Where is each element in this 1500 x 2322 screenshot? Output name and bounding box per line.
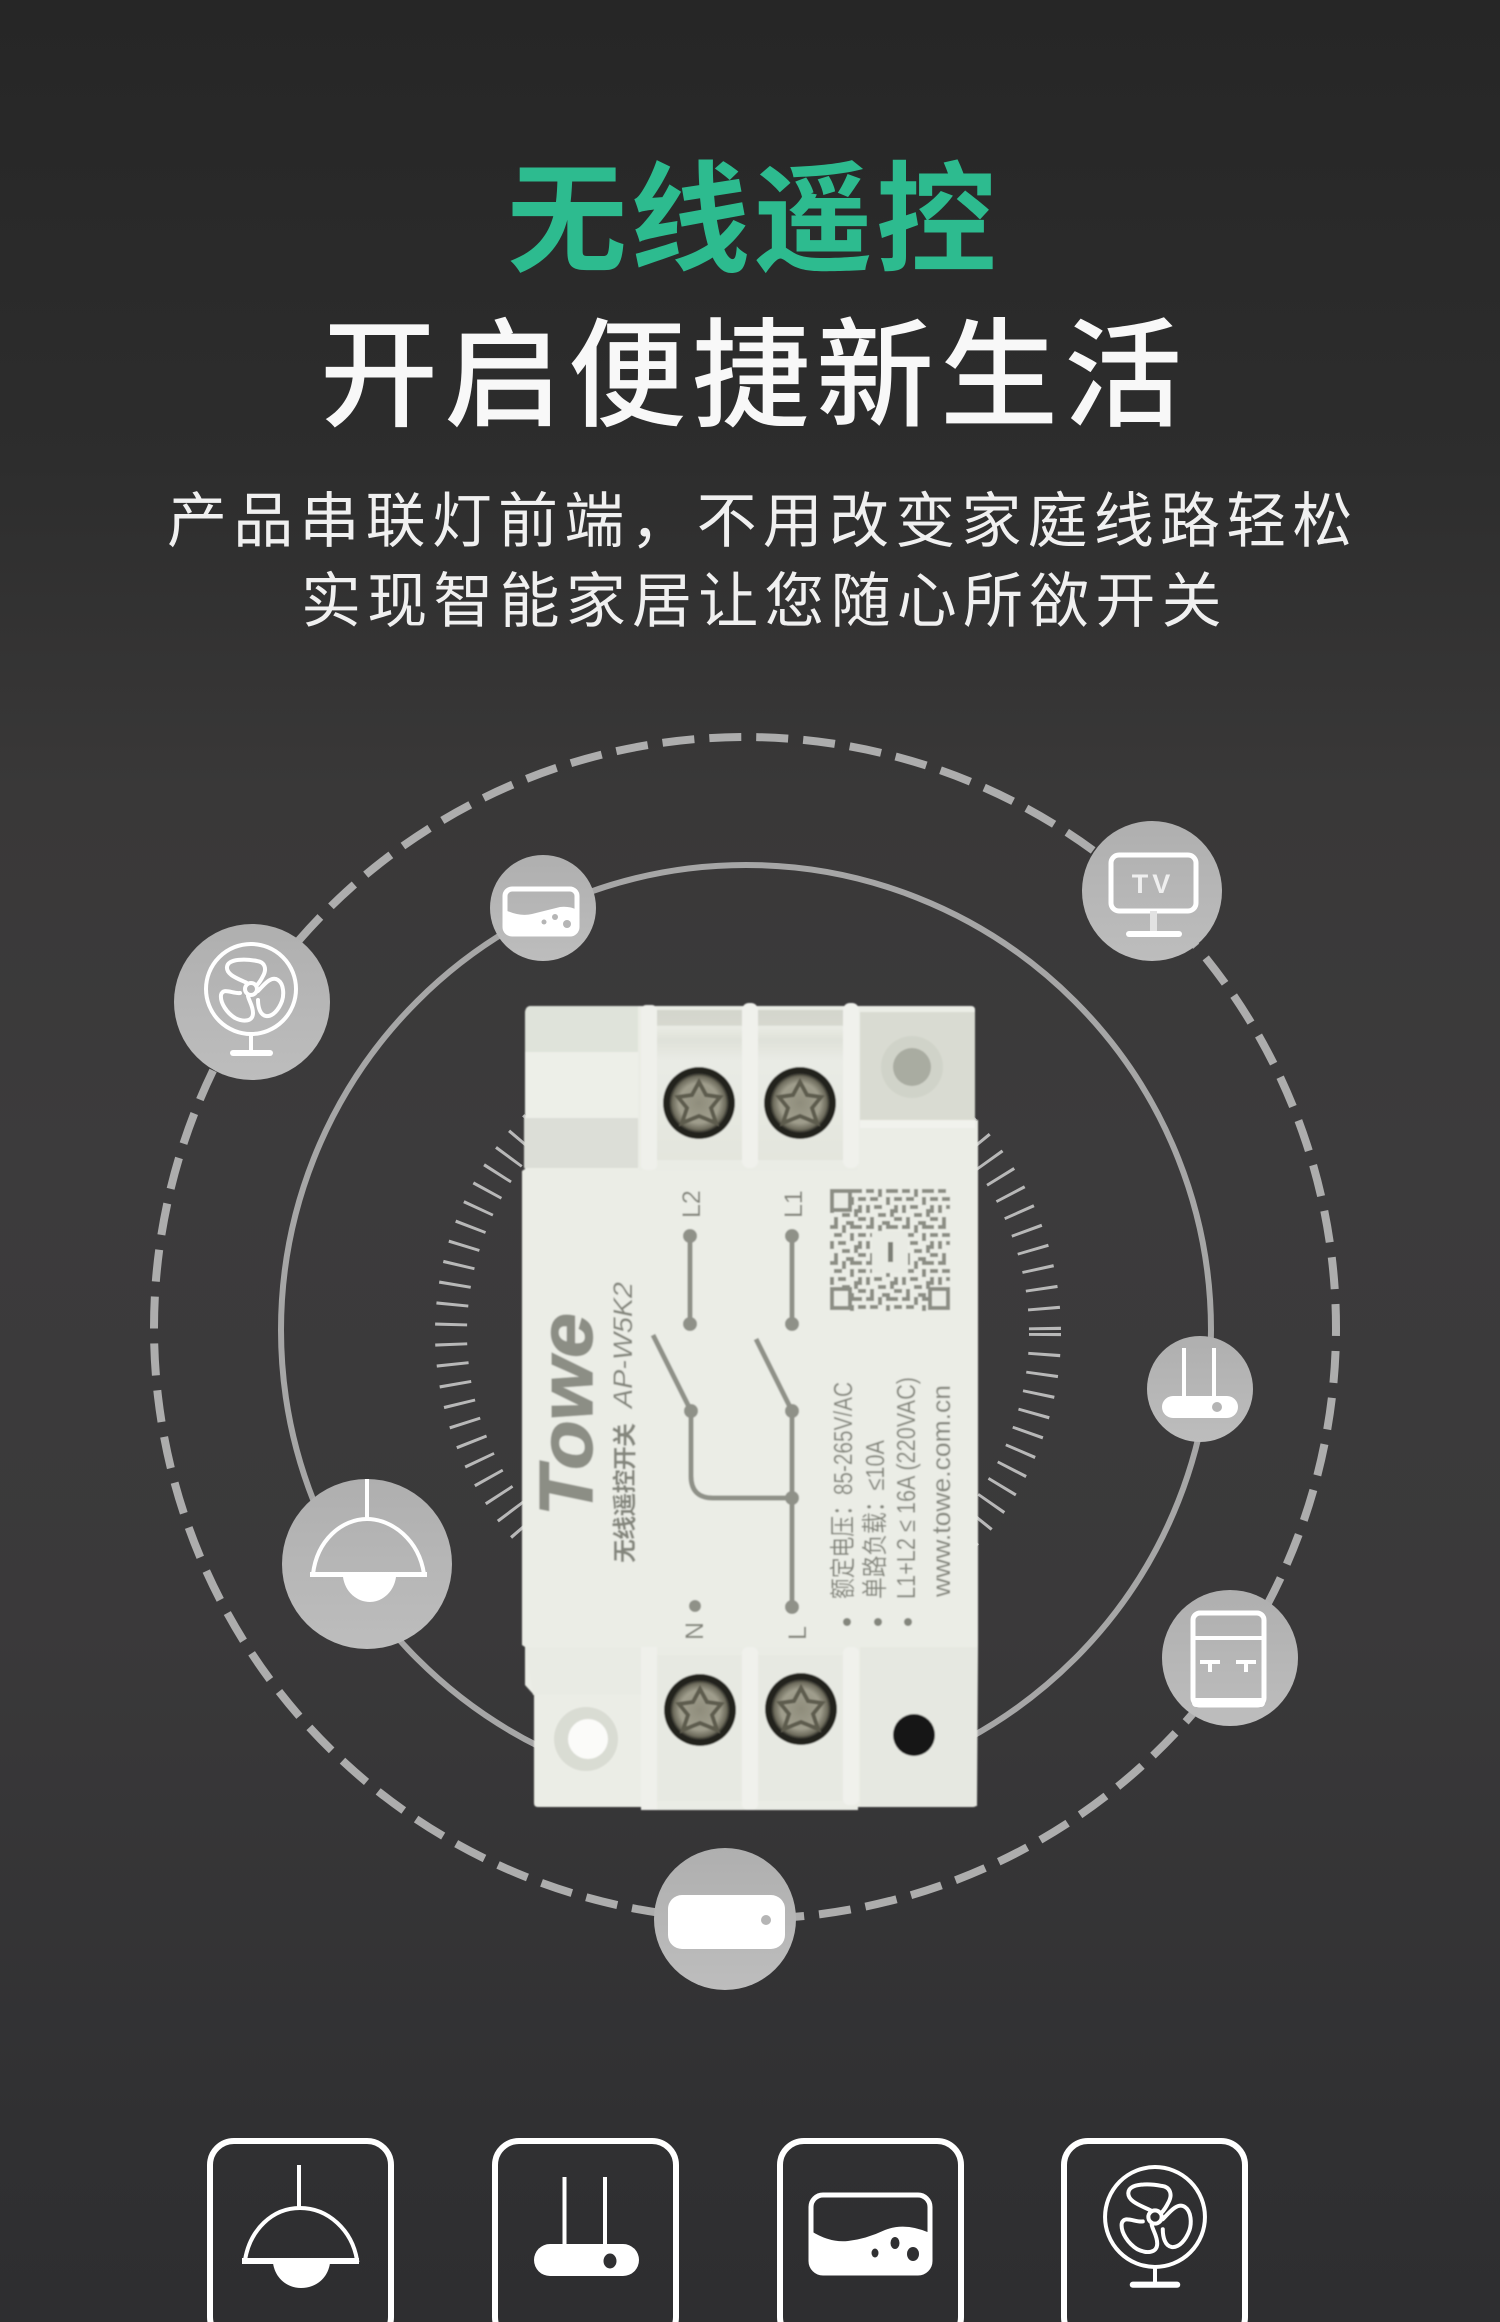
top terminals — [641, 1003, 859, 1170]
product: wireless switch module — [522, 1003, 978, 1810]
specification text: www.towe.com.cn — [926, 1385, 956, 1598]
model label: 无线遥控开关 — [612, 1423, 639, 1563]
specification text: L1+L2 ≤ 16A (220VAC) — [891, 1377, 921, 1599]
QR code — [830, 1189, 950, 1311]
device body — [522, 1006, 978, 1810]
bottom terminals — [641, 1647, 859, 1810]
node: lamp — [282, 1479, 452, 1649]
node: fan — [174, 924, 330, 1080]
terminal labels: L — [784, 1626, 812, 1640]
outer dashed orbit — [154, 737, 1336, 1919]
model label: AP-W5K2 — [608, 1282, 638, 1410]
specification text: 单路负载：≤10A — [860, 1439, 890, 1599]
node: socket — [1162, 1590, 1298, 1726]
model label — [608, 1282, 639, 1563]
node: water heater — [490, 855, 596, 961]
node: sensor — [654, 1848, 796, 1990]
title: white heading: 开启便捷新生活 — [320, 311, 1188, 443]
mounting holes — [554, 1036, 943, 1771]
bottom icon box: router — [495, 2141, 676, 2322]
node: router — [1147, 1336, 1253, 1442]
terminal labels: L1 — [780, 1190, 808, 1218]
wiring schematic — [653, 1229, 799, 1614]
specification text: 额定电压：85-265V/AC — [828, 1382, 858, 1599]
subtitle text block: 实现智能家居让您随心所欲开关 — [301, 568, 1228, 635]
brand logo: Towe — [524, 1313, 608, 1516]
terminal labels: N — [681, 1622, 709, 1640]
node: TV — [1082, 821, 1222, 961]
bottom icon box: lamp — [210, 2141, 391, 2322]
radial tick ring — [451, 1036, 1045, 1630]
terminal labels: L2 — [678, 1190, 706, 1218]
node: TV: TV — [1132, 869, 1174, 899]
inner solid orbit — [281, 865, 1211, 1795]
bottom icon box: fan — [1064, 2141, 1245, 2322]
subtitle text block: 产品串联灯前端，不用改变家庭线路轻松 — [167, 488, 1359, 555]
subtitle text block — [167, 488, 1359, 635]
specification text — [828, 1377, 956, 1626]
terminal labels — [678, 1190, 812, 1640]
title: green heading: 无线遥控 — [507, 154, 999, 288]
bottom icon box: water heater — [780, 2141, 961, 2322]
